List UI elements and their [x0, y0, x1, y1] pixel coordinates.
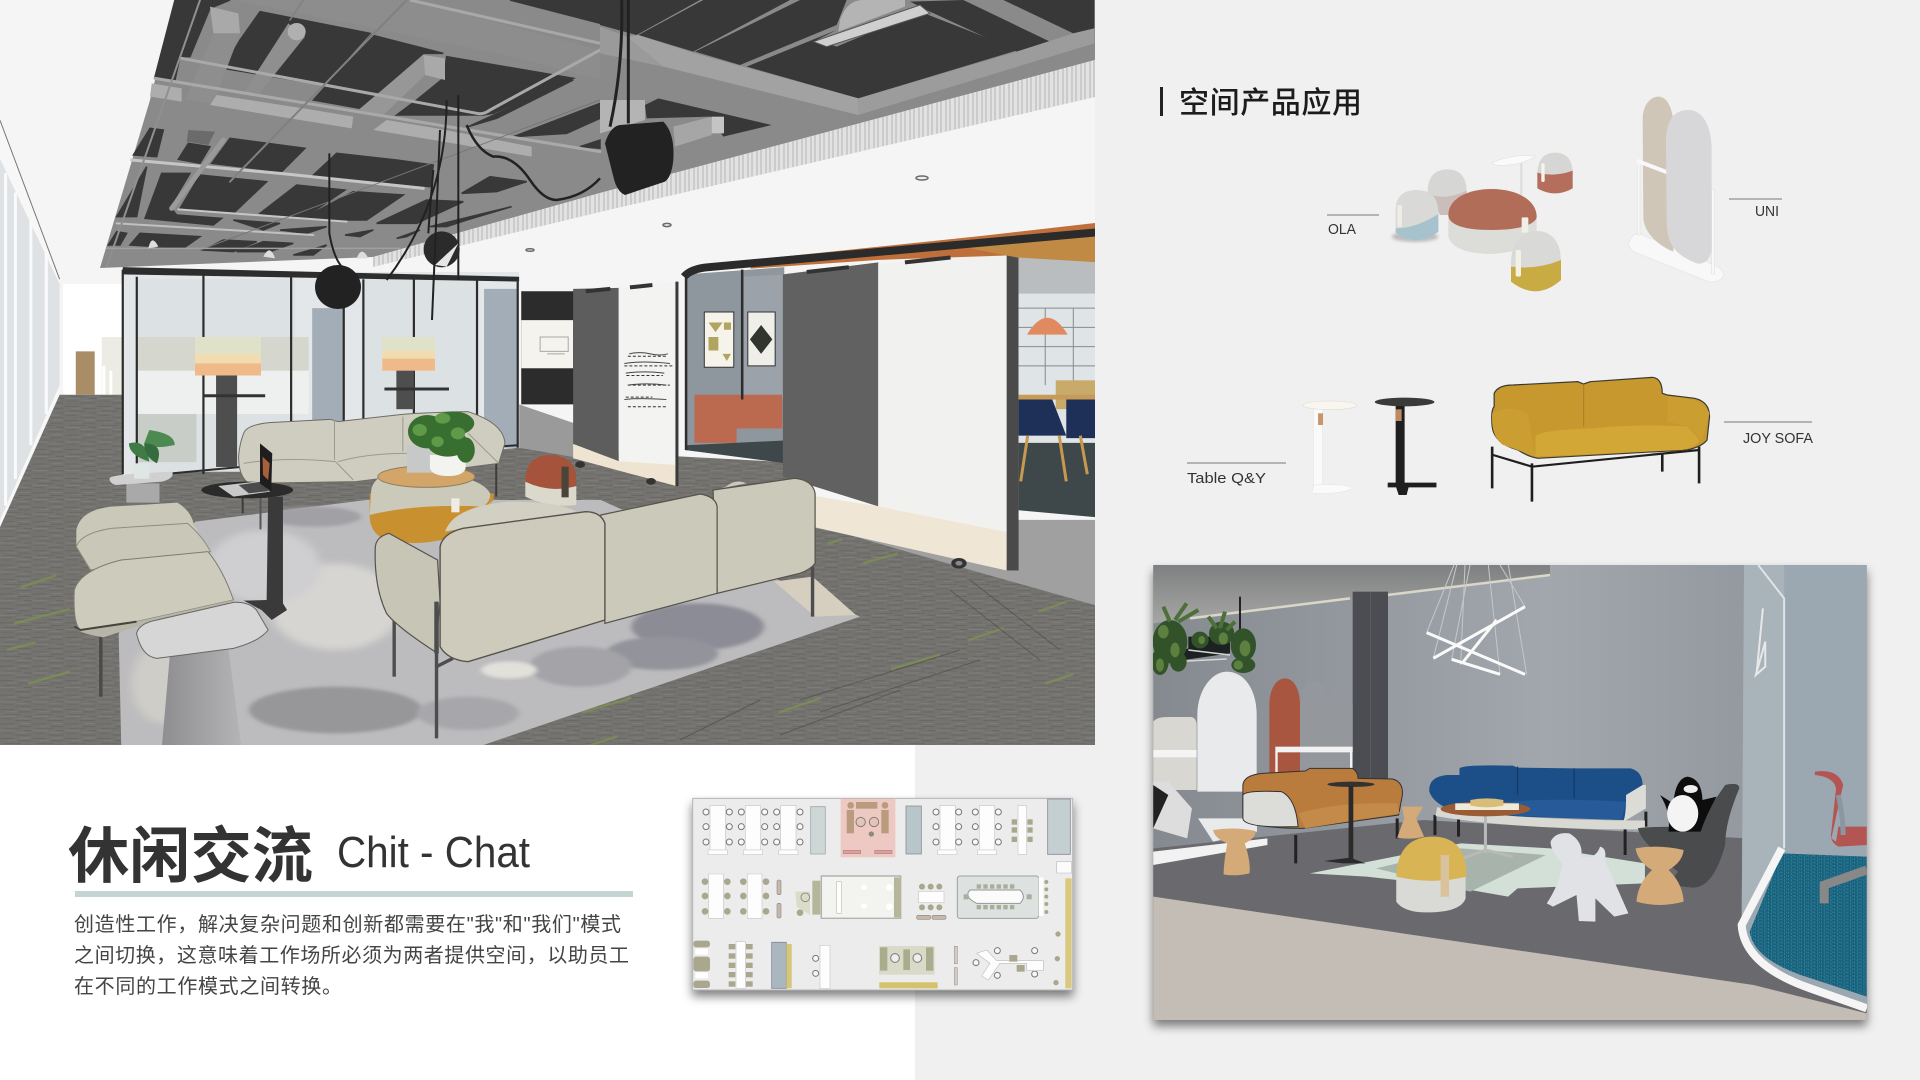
black table	[1375, 398, 1436, 495]
large pouf	[1448, 189, 1537, 254]
room with pendant lamp and chairs	[1019, 255, 1100, 518]
main title: 休闲交流	[68, 822, 313, 890]
product: UNI screen	[1628, 97, 1782, 282]
description paragraph: 之间切换，这意味着工作场所必须为两者提供空间，以助员工	[74, 944, 629, 967]
white table	[1303, 401, 1357, 494]
timber slat canopy and black track	[586, 222, 1100, 291]
floors	[1153, 820, 1867, 1020]
back wall with whiteboard	[521, 291, 575, 404]
workstation left	[1153, 782, 1267, 865]
side plant on stand	[109, 430, 175, 503]
area rug	[119, 500, 860, 745]
panel: main interior rendering of the lounge	[0, 0, 1100, 750]
cork stool front	[1635, 847, 1684, 905]
cork stools back	[1213, 807, 1424, 875]
pendant lights small with cables	[315, 95, 600, 320]
stool grey back	[1428, 169, 1467, 215]
white dog sculpture	[1547, 833, 1628, 922]
arched acoustic screens	[1269, 678, 1353, 773]
mobile whiteboard partition left	[573, 282, 677, 486]
main title	[68, 822, 530, 890]
floor plan thumbnail	[693, 798, 1073, 990]
floor plan round chairs	[703, 809, 1038, 978]
whiteboard scribbles on the left partition	[624, 353, 670, 400]
ceiling downlights	[526, 176, 928, 251]
front grey side table	[137, 602, 268, 745]
laptop table	[201, 443, 293, 620]
main title: Chit - Chat	[337, 828, 530, 877]
floor plan white desks	[708, 806, 1027, 989]
white arched panel	[1197, 672, 1257, 792]
orange sofa	[1243, 768, 1402, 863]
description paragraph: 在不同的工作模式之间转换。	[74, 975, 342, 998]
product: JOY SOFA	[1492, 377, 1813, 502]
red ottoman	[525, 455, 576, 506]
photo: lounge with blue and orange sofas	[1151, 565, 1867, 1020]
floor plan highlighted lounge	[841, 799, 895, 857]
blue sofa	[1429, 765, 1646, 855]
hanging plant	[1151, 597, 1256, 675]
back screen left	[1153, 717, 1197, 790]
mobile whiteboard partition right	[783, 253, 1019, 570]
background: grey right panel	[915, 0, 1920, 1080]
ceiling structure right part	[600, 0, 1094, 147]
wall	[1153, 565, 1867, 848]
ceiling structure left part	[100, 0, 1095, 268]
linear pendant light	[1427, 565, 1527, 674]
glass meeting pods in the back	[123, 267, 519, 477]
stool blue	[1392, 190, 1438, 242]
product: OLA stools group	[1327, 153, 1573, 291]
floor plan booths and meeting rooms	[693, 799, 1072, 988]
grey walkway floor	[519, 404, 1100, 607]
description paragraph: 创造性工作，解决复杂问题和创新都需要在"我"和"我们"模式	[74, 913, 621, 936]
product: Table Q&Y: Table Q&Y	[1187, 470, 1266, 487]
coffee table with books	[1441, 798, 1530, 858]
carpet green flecks	[7, 539, 1073, 750]
product: JOY SOFA: JOY SOFA	[1743, 430, 1813, 447]
description paragraph	[74, 913, 629, 998]
bench seat left	[74, 503, 233, 697]
title underline	[75, 891, 633, 897]
ceiling with light cove	[1153, 565, 1550, 792]
product: UNI screen: UNI	[1755, 203, 1779, 220]
yellow pouf	[1396, 837, 1467, 912]
black high table	[1324, 782, 1375, 863]
stool terracotta back	[1537, 153, 1573, 193]
back sofa	[239, 412, 505, 513]
dark chair	[1638, 784, 1739, 888]
penguin toy	[1660, 777, 1717, 832]
stool yellow	[1511, 231, 1561, 291]
carpet dark weave lines	[680, 580, 1060, 740]
product: OLA stools group: OLA	[1328, 221, 1356, 238]
small white table	[1492, 155, 1536, 195]
meeting room behind partition	[686, 267, 784, 463]
product: Table Q&Y	[1187, 398, 1436, 495]
front sofa	[375, 478, 815, 738]
round table with plant and ottoman	[370, 411, 494, 543]
glass room with teal carpet and red chair	[1742, 565, 1867, 1010]
ceiling, column, plant, arches and pendant	[1151, 565, 1550, 792]
far window wall on the left	[0, 120, 126, 530]
section heading with bar: 空间产品应用	[1179, 87, 1362, 120]
floor plan taupe chairs	[702, 819, 1061, 987]
carpet floor	[0, 395, 1100, 750]
pendant light large	[605, 0, 674, 195]
